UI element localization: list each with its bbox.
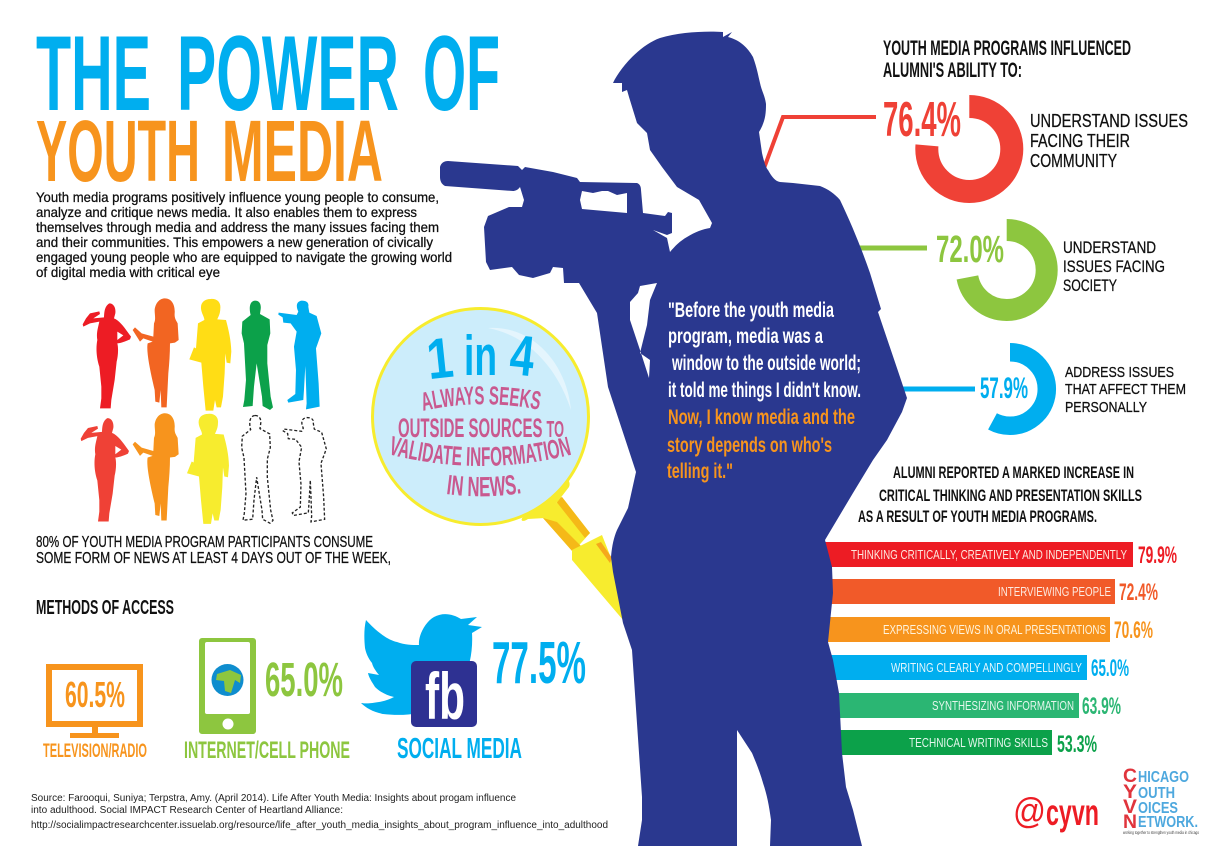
donut: personally 57.9%: PERSONALLY	[1065, 399, 1147, 416]
donut: community 76.4%	[883, 93, 1188, 192]
intro paragraph: of digital media with critical eye	[36, 264, 220, 280]
quote: window to the outside world;	[671, 352, 861, 375]
television / radio stat: TELEVISION/RADIO	[43, 741, 147, 762]
intro paragraph	[36, 189, 452, 280]
donut: personally 57.9%: 57.9%	[980, 372, 1028, 405]
quote: it told me things I didn't know.	[668, 379, 861, 402]
intro paragraph: Youth media programs positively influence young people to consume,	[36, 189, 439, 205]
connector line: personally	[890, 386, 975, 392]
donut: community 76.4%: COMMUNITY	[1030, 151, 1117, 171]
big number: 4	[507, 323, 538, 389]
bar: writing clearly: WRITING CLEARLY AND COMPELLINGLY	[891, 660, 1082, 675]
twitter handle: cyvn	[1046, 792, 1099, 833]
donut: society 72.0%: ISSUES FACING	[1063, 257, 1165, 276]
bar: interviewing people: INTERVIEWING PEOPLE	[998, 584, 1111, 599]
logo: Chicago Youth Voices Network: OICES	[1138, 800, 1178, 817]
bar: synthesizing information: 63.9%	[1082, 693, 1121, 720]
logo: Chicago Youth Voices Network: Y	[1123, 782, 1137, 803]
bar: oral presentations	[815, 617, 1153, 644]
donut: community 76.4%: 76.4%	[883, 93, 961, 147]
source citation: Source: Farooqui, Suniya; Terpstra, Amy. (April 2014). Life After Youth Media: Insights about progam influence	[31, 793, 516, 804]
donut: community 76.4%: UNDERSTAND ISSUES	[1030, 111, 1188, 131]
lens text: always seeks outside sources: VALIDATE INFORMATION	[392, 436, 571, 466]
logo: Chicago Youth Voices Network: N	[1123, 812, 1137, 833]
bar: writing clearly	[815, 655, 1129, 682]
connector line: society	[850, 246, 927, 250]
bar: thinking critically: 79.9%	[1138, 542, 1177, 569]
quote: Now, I know media and the	[668, 406, 855, 429]
twitter handle: @	[1013, 790, 1046, 831]
internet / cell phone stat: 65.0%	[265, 654, 343, 707]
quote: story depends on who's	[667, 434, 832, 457]
big number	[424, 323, 538, 392]
silhouette: youth with video camera	[440, 32, 907, 846]
lens highlight	[488, 328, 571, 410]
bar: thinking critically: THINKING CRITICALLY, CREATIVELY AND INDEPENDENTLY	[851, 547, 1127, 562]
bar: oral presentations: EXPRESSING VIEWS IN ORAL PRESENTATIONS	[883, 622, 1106, 637]
donut: community 76.4%: FACING THEIR	[1030, 131, 1130, 151]
donut: personally 57.9%: ADDRESS ISSUES	[1065, 364, 1174, 381]
bar chart: skills	[815, 542, 1177, 758]
bar: writing clearly: 65.0%	[1091, 655, 1129, 682]
social media stat	[361, 614, 586, 765]
lens text: always seeks outside sources	[392, 386, 571, 496]
magnifying glass callout: 1 in 4	[371, 307, 623, 622]
television / radio stat	[43, 667, 147, 762]
source citation	[31, 793, 608, 831]
social media stat: SOCIAL MEDIA	[397, 733, 522, 765]
title	[36, 13, 500, 200]
quote	[667, 299, 861, 483]
title: YOUTH	[36, 103, 200, 200]
lens text: always seeks outside sources: OUTSIDE SOURCES TO	[398, 413, 564, 443]
bar: thinking critically	[815, 542, 1177, 569]
intro paragraph: and their communities. This empowers a new generation of civically	[36, 234, 433, 250]
social media stat: fb	[425, 659, 465, 733]
logo: Chicago Youth Voices Network: V	[1123, 797, 1137, 818]
icon: magnifier handle	[522, 479, 640, 640]
bar: synthesizing information	[815, 693, 1121, 720]
title: MEDIA	[222, 103, 383, 200]
quote: telling it."	[667, 460, 733, 483]
logo: Chicago Youth Voices Network	[1123, 766, 1199, 835]
donut: society 72.0%	[936, 229, 1165, 310]
logo: Chicago Youth Voices Network: OUTH	[1138, 785, 1175, 802]
quote: program, media was a	[668, 325, 823, 348]
bar: interviewing people	[815, 579, 1158, 606]
heading: alumni ability	[883, 37, 1131, 82]
skill bars heading: AS A RESULT OF YOUTH MEDIA PROGRAMS.	[858, 507, 1097, 526]
bar: technical writing: TECHNICAL WRITING SKILLS	[909, 735, 1048, 750]
title: THE	[36, 13, 151, 133]
donut: personally 57.9%	[973, 352, 1186, 426]
internet / cell phone stat: INTERNET/CELL PHONE	[184, 737, 350, 764]
logo: Chicago Youth Voices Network: C	[1123, 766, 1137, 787]
title: OF	[423, 13, 500, 133]
lens text: always seeks outside sources: ALWAYS SEEKS	[423, 386, 541, 411]
donut: society 72.0%: UNDERSTAND	[1063, 238, 1156, 257]
heading: alumni ability: ALUMNI'S ABILITY TO:	[883, 59, 1022, 82]
big number: in	[464, 324, 497, 388]
title: POWER	[177, 13, 399, 133]
source citation: http://socialimpactresearchcenter.issuelab.org/resource/life_after_youth_media_insights_about_program_influence_into_adulthood	[31, 820, 608, 831]
bar: technical writing	[815, 730, 1097, 758]
bar: synthesizing information: SYNTHESIZING INFORMATION	[932, 698, 1074, 713]
twitter handle	[1013, 790, 1099, 833]
television / radio stat: 60.5%	[65, 674, 125, 715]
news consumption statement: 80% OF YOUTH MEDIA PROGRAM PARTICIPANTS CONSUME	[36, 534, 373, 551]
skill bars heading	[858, 463, 1142, 526]
bar: technical writing: 53.3%	[1057, 731, 1097, 758]
intro paragraph: engaged young people who are equipped to navigate the growing world	[36, 249, 452, 265]
quote: "Before the youth media	[668, 299, 834, 322]
intro paragraph: analyze and critique news media. It also enables them to express	[36, 204, 417, 220]
bar: interviewing people: 72.4%	[1119, 579, 1158, 606]
donut: society 72.0%: SOCIETY	[1063, 276, 1117, 295]
logo: Chicago Youth Voices Network: HICAGO	[1138, 769, 1189, 786]
lens text: always seeks outside sources: IN NEWS.	[447, 475, 521, 496]
heading: methods of access: METHODS OF ACCESS	[36, 597, 174, 619]
news consumption statement: SOME FORM OF NEWS AT LEAST 4 DAYS OUT OF THE WEEK,	[36, 550, 391, 567]
connector line: community	[760, 117, 876, 179]
donut: society 72.0%: 72.0%	[936, 229, 1004, 271]
donut: personally 57.9%: THAT AFFECT THEM	[1065, 381, 1186, 398]
source citation: into adulthood. Social IMPACT Research Center of Heartland Alliance:	[31, 805, 343, 816]
intro paragraph: themselves through media and address the many issues facing them	[36, 219, 439, 235]
social media stat: 77.5%	[492, 630, 586, 696]
bar: oral presentations: 70.6%	[1114, 617, 1153, 644]
news consumption statement	[36, 534, 391, 567]
big number: 1	[424, 326, 456, 392]
internet / cell phone stat	[184, 638, 350, 764]
logo: Chicago Youth Voices Network: ETWORK.	[1138, 814, 1198, 831]
silhouettes: ten young people, eight coloured	[81, 298, 326, 524]
